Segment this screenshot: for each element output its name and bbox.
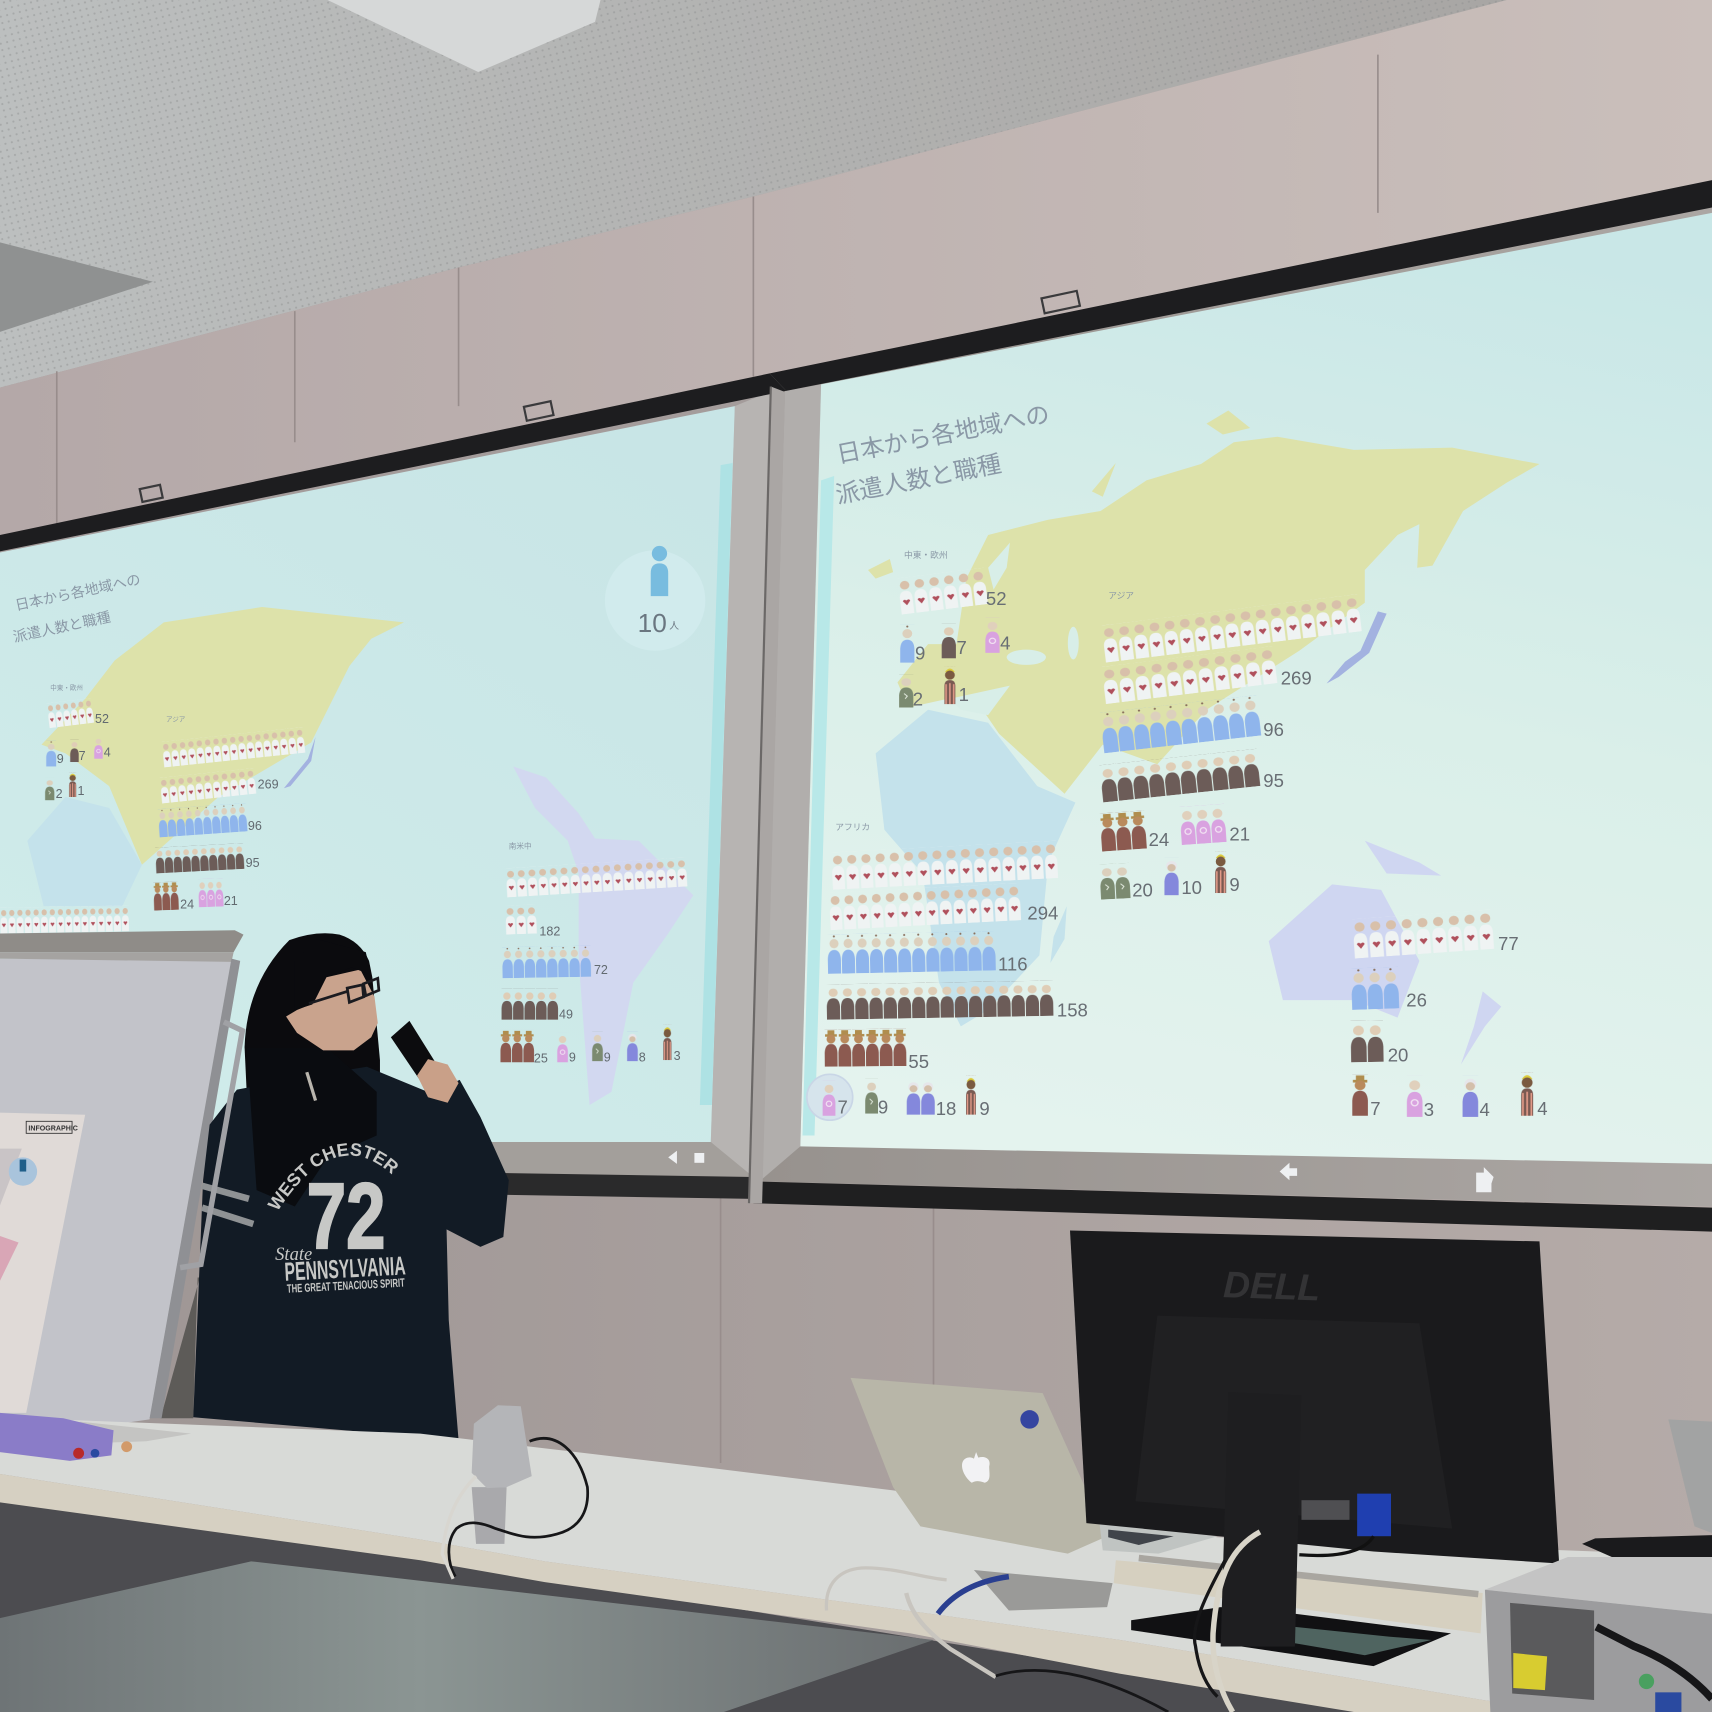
purple 4: 4	[1479, 1099, 1490, 1120]
arc wording: WEST CHESTER	[267, 1143, 398, 1210]
pink 3: 3	[1424, 1099, 1434, 1120]
presenter	[193, 933, 509, 1438]
monitor	[1070, 1230, 1559, 1564]
hat row 24: 24	[1149, 829, 1169, 850]
heart row 1	[830, 841, 1059, 890]
title	[833, 401, 1052, 509]
brown row 20	[1350, 1020, 1408, 1065]
keyboard keys	[1139, 1558, 1478, 1594]
map: Africa	[876, 710, 1075, 1026]
green 2: 2	[913, 688, 923, 709]
region label: 中東・欧州	[904, 549, 948, 560]
hair	[245, 933, 380, 1210]
map: Americas	[513, 766, 693, 1105]
heart row 2, 269: 269	[258, 777, 279, 791]
legend text: 10	[638, 608, 667, 638]
green 2	[899, 674, 923, 709]
apple logo	[962, 1452, 990, 1483]
slide contents	[0, 463, 733, 1105]
hat row 55	[824, 1029, 929, 1072]
striped 1: 1	[78, 784, 85, 798]
right screen housing	[759, 202, 1712, 1206]
brown row 49: 49	[559, 1008, 573, 1022]
laptop base	[1099, 1523, 1217, 1554]
desk	[0, 1417, 1712, 1712]
poster map: grey	[0, 1149, 22, 1205]
yellow dust pad	[1513, 1653, 1547, 1690]
silver mount	[472, 1405, 532, 1488]
green 2: 2	[56, 787, 63, 801]
desk front edge	[0, 1474, 1568, 1712]
hat row 24: 24	[180, 897, 194, 911]
pink 3	[1406, 1075, 1434, 1120]
laptop lid	[851, 1378, 1107, 1554]
adapter box	[974, 1570, 1113, 1610]
monitor back	[1070, 1230, 1559, 1564]
blue row 116	[827, 931, 1028, 975]
pink 7 with Prezi badge	[807, 1074, 853, 1120]
blue 9: 9	[57, 752, 64, 766]
poster heading box	[26, 1121, 78, 1133]
orange pins	[121, 1441, 132, 1452]
arc path text	[277, 1156, 415, 1212]
glasses	[309, 978, 379, 1003]
blue row 26: 26	[1406, 990, 1427, 1011]
purple 18	[906, 1079, 956, 1119]
green plug	[1639, 1674, 1654, 1689]
accent stripe	[700, 463, 733, 1105]
purple 10	[1164, 858, 1202, 898]
accent stripe	[802, 476, 834, 1136]
brown row 158	[826, 981, 1088, 1020]
hoodie	[193, 1067, 509, 1440]
panel: left screen	[0, 391, 772, 1179]
green row 20	[1099, 863, 1153, 900]
Pennsylvania: PENNSYLVANIA	[284, 1250, 406, 1287]
purple 8: 8	[639, 1050, 646, 1064]
green 9	[592, 1031, 611, 1064]
dark floor zone	[0, 1496, 1354, 1712]
Americas label: 南米中	[509, 840, 532, 850]
title	[13, 575, 140, 642]
panel: right screen	[759, 202, 1712, 1206]
region: Europe	[896, 549, 1010, 709]
purple 18: 18	[936, 1098, 956, 1119]
left screen top bar	[0, 373, 786, 551]
hat row 24	[1099, 810, 1169, 852]
pink row 21	[1179, 804, 1250, 845]
base plate	[1131, 1607, 1451, 1666]
pink 7 with Prezi badge: 7	[837, 1097, 848, 1118]
keyboard body	[1114, 1560, 1483, 1633]
poster legend circle	[9, 1157, 37, 1186]
monitor stand	[1221, 1392, 1301, 1646]
circle backdrop	[632, 551, 704, 596]
left region: Africa heart row	[0, 906, 130, 934]
brown row 20: 20	[1388, 1044, 1408, 1065]
legend text: 人	[669, 621, 679, 632]
blue row 96: 96	[248, 819, 262, 833]
phone	[1582, 1535, 1712, 1560]
title: 派遣人数と職種	[833, 451, 1004, 509]
blue plug	[1655, 1692, 1681, 1712]
Europe label: 中東・欧州	[50, 683, 83, 692]
heart row 2, 294: 294	[1027, 902, 1058, 923]
icon: next arrow	[1476, 1167, 1494, 1192]
ceiling	[0, 0, 1507, 388]
marker tray	[0, 1413, 191, 1461]
person icon	[651, 546, 668, 596]
striped 9: 9	[1229, 874, 1240, 895]
heart row 1	[505, 857, 688, 897]
power connector	[1596, 1627, 1712, 1699]
heart row 1	[1100, 594, 1363, 663]
hat row 25	[500, 1030, 548, 1062]
heart row 77: 77	[1498, 933, 1519, 954]
heart row 2, 182: 182	[539, 925, 560, 939]
sticker	[1020, 1410, 1039, 1429]
brown row 95: 95	[246, 856, 260, 870]
laptop	[851, 1378, 1217, 1554]
hat row 55: 55	[908, 1051, 929, 1072]
tower top	[1485, 1557, 1712, 1614]
sleeve stripes	[202, 1186, 253, 1224]
hand	[417, 1059, 459, 1103]
number 72: 72	[307, 1164, 385, 1268]
poster map: pink	[0, 1236, 19, 1281]
map: Japan	[1327, 611, 1387, 683]
brown 7	[941, 623, 967, 658]
purple 4	[1462, 1075, 1490, 1120]
blue pen cap	[91, 1449, 99, 1458]
brown row 158: 158	[1057, 999, 1088, 1020]
icon: player controls	[668, 1151, 704, 1164]
poster legend icon	[20, 1160, 26, 1172]
brown row 95	[1099, 749, 1284, 802]
striped 9	[1213, 852, 1240, 895]
tagline: THE GREAT TENACIOUS SPIRIT	[287, 1276, 405, 1296]
tower body	[1485, 1590, 1712, 1712]
blue 9: 9	[915, 642, 925, 663]
striped 9: 9	[979, 1098, 990, 1119]
blue row 96	[1099, 695, 1284, 753]
purple 10: 10	[1181, 877, 1202, 898]
striped 3: 3	[674, 1049, 681, 1063]
pink 4	[985, 618, 1010, 654]
brown 7: 7	[79, 749, 86, 763]
hat 7	[1352, 1074, 1381, 1119]
striped 1	[942, 666, 969, 705]
heart row 2, 269	[159, 768, 279, 804]
pink 9: 9	[569, 1050, 576, 1064]
legend text	[640, 614, 679, 632]
legend circle: 10 people	[632, 546, 704, 632]
red pen cap	[73, 1448, 84, 1459]
hat 7: 7	[1370, 1098, 1381, 1119]
left region: Asia	[153, 716, 306, 911]
brown row 95	[155, 843, 260, 873]
hoodie print	[267, 1143, 406, 1296]
heart row 52: 52	[95, 712, 109, 726]
title: 日本から各地域への	[835, 401, 1052, 469]
blue row 96: 96	[1263, 719, 1284, 740]
State: State	[275, 1244, 312, 1265]
face	[286, 970, 378, 1050]
long hair over hoodie	[247, 1048, 377, 1206]
striped 4: 4	[1537, 1098, 1548, 1119]
board side rail	[150, 959, 240, 1418]
tower fan grille	[1510, 1603, 1594, 1700]
map: Eurasia	[868, 411, 1539, 794]
heart row 1	[161, 727, 306, 768]
brand: DELL	[1223, 1263, 1321, 1308]
title: 日本から各地域への	[14, 572, 142, 614]
fringe	[295, 939, 371, 1010]
brown 7: 7	[956, 637, 967, 658]
blue row 116: 116	[998, 954, 1028, 975]
heart row 77	[1351, 909, 1519, 959]
ceiling light fixture	[328, 0, 601, 72]
board upper strip	[0, 952, 234, 962]
hat row 25: 25	[534, 1051, 548, 1065]
map: Oceania	[1269, 841, 1501, 1065]
right screen bottom bar	[753, 1181, 1712, 1232]
left screen bottom bar	[480, 1173, 753, 1199]
heart row 2, 269	[1100, 646, 1312, 704]
metal foreground table	[0, 1561, 934, 1712]
ceiling air vent	[0, 242, 153, 332]
region: Asia	[1099, 590, 1363, 900]
left screen projection	[0, 406, 735, 1142]
PC tower	[1485, 1557, 1712, 1712]
whiteboard handle	[180, 1022, 242, 1268]
silver tablet	[80, 1422, 191, 1443]
monitor base	[1131, 1607, 1451, 1666]
board surface	[0, 959, 231, 1441]
title: 派遣人数と職種	[12, 610, 112, 646]
right screen projection	[800, 213, 1712, 1164]
lower wall	[0, 1157, 1712, 1616]
pink row 21: 21	[224, 894, 238, 908]
desk top	[0, 1417, 1712, 1712]
VGA cable	[1299, 1536, 1374, 1555]
monitor centre panel	[1136, 1316, 1452, 1529]
left region: Europe	[45, 683, 111, 801]
striped 1: 1	[959, 684, 969, 705]
laptop keys	[1108, 1530, 1174, 1545]
pink 4: 4	[104, 746, 111, 760]
keyboard	[1114, 1558, 1483, 1633]
hat row 24	[153, 882, 194, 911]
blue row 26	[1350, 967, 1427, 1011]
wall panel seams	[57, 55, 1378, 1496]
striped 9	[964, 1075, 990, 1119]
right screen side frame	[762, 384, 821, 1179]
blue row 72: 72	[594, 963, 608, 977]
left region: Americas	[500, 840, 688, 1065]
poster on board	[0, 1113, 85, 1413]
region label: アフリカ	[835, 822, 870, 832]
microphone	[391, 1021, 437, 1081]
screen hooks	[140, 291, 1080, 502]
white cable	[442, 1476, 476, 1579]
inland seas	[950, 543, 1079, 715]
pink row 21: 21	[1229, 824, 1250, 845]
brown row 49	[501, 989, 573, 1022]
purple 8	[627, 1031, 646, 1064]
cable mount	[442, 1405, 588, 1579]
striped 3	[662, 1025, 681, 1063]
heart row 52	[896, 568, 1007, 615]
green 9: 9	[878, 1097, 888, 1118]
icon: previous arrow	[1280, 1163, 1297, 1180]
desk cables	[826, 1532, 1260, 1712]
region label: アジア	[1108, 590, 1134, 600]
left screen lower housing	[480, 1142, 753, 1177]
second laptop	[1668, 1419, 1712, 1533]
heart row 2, 294	[828, 883, 1058, 930]
right screen top bar	[770, 180, 1712, 391]
mount post	[472, 1487, 507, 1544]
markers	[0, 1413, 114, 1461]
green 9	[865, 1078, 888, 1118]
striped 4	[1519, 1072, 1548, 1119]
map: Eurasia	[41, 607, 404, 865]
heart row 2, 182	[506, 907, 560, 936]
upper wall	[0, 0, 1712, 551]
pink 9	[557, 1036, 576, 1062]
left screen housing	[711, 391, 772, 1179]
whiteboard	[0, 930, 243, 1441]
poster sheet	[0, 1113, 85, 1413]
brown row 95: 95	[1263, 770, 1284, 791]
green row 20: 20	[1132, 879, 1153, 900]
map: Japan	[284, 737, 316, 788]
base inset	[1295, 1627, 1431, 1655]
blue row 96	[157, 803, 262, 837]
VGA connector	[1357, 1494, 1391, 1536]
region: Oceania	[1350, 909, 1548, 1120]
region: Africa	[807, 822, 1088, 1120]
green 9: 9	[604, 1050, 611, 1064]
heart row 2, 269: 269	[1281, 668, 1312, 689]
wall gap behind board	[160, 1277, 200, 1418]
Asia label: アジア	[166, 716, 186, 724]
board top rail	[0, 930, 243, 952]
map: Africa	[27, 797, 142, 906]
pink 4: 4	[1000, 633, 1010, 654]
blue row 72	[502, 946, 608, 978]
label sticker	[1301, 1500, 1350, 1520]
heart row 52: 52	[986, 588, 1007, 609]
pink row 21	[198, 878, 238, 908]
centre divider	[749, 387, 785, 1203]
poster heading box: INFOGRAPHIC	[28, 1125, 78, 1133]
mount cables	[449, 1438, 588, 1577]
blue 9	[900, 625, 925, 663]
drawstring	[307, 1072, 316, 1101]
